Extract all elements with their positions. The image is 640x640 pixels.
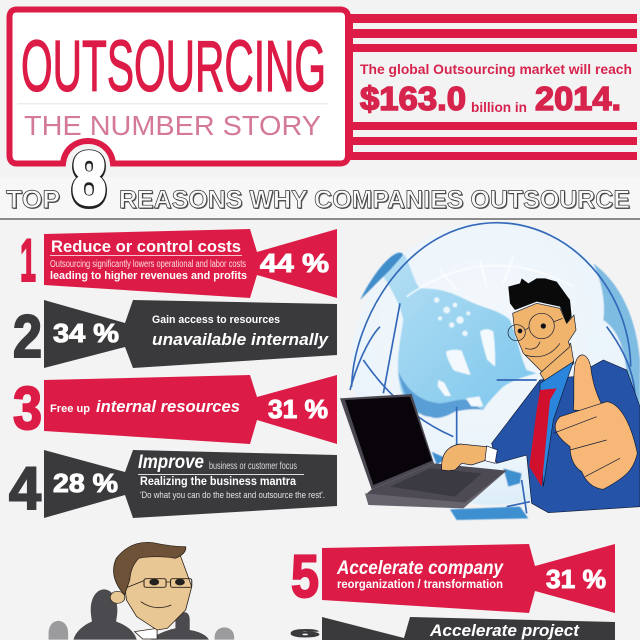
reason 2: 34 % [53,318,119,348]
number 5: 5 [291,543,319,610]
dark silhouettes [73,589,209,640]
globe rings [350,223,635,513]
reason 1: 1 [20,227,36,294]
number 6: 6 [291,628,319,640]
heading banner [0,137,640,221]
reason 4: business or customer focus [209,461,297,472]
reason 2 [13,300,337,370]
market stripes [350,14,637,160]
reason 6 [291,617,615,640]
businessman with silhouettes illustration [49,542,234,640]
heading banner: REASONS WHY COMPANIES OUTSOURCE [120,187,631,215]
reason 2: Gain access to resources [152,314,280,326]
reason 3: 31 % [268,394,328,424]
laptop [340,394,507,508]
reason 1: Outsourcing significantly lowers operational and labor costs [50,259,246,270]
title text: OUTSOURCING [21,27,326,107]
reason 4: Realizing the business mantra [140,476,297,488]
heading banner: REASONS WHY COMPANIES OUTSOURCE [119,186,630,214]
big number 8: 8 [72,138,106,221]
heading banner: TOP [7,187,61,215]
number 3: 3 [13,375,42,442]
globe illustration with man and laptop [340,222,640,520]
reason 5: reorganization / transformation [337,577,503,591]
man [442,278,640,513]
subtitle: THE NUMBER STORY [24,110,321,141]
market forecast text [360,62,632,117]
thumbs up fist [553,355,637,489]
reason 1 [20,227,337,298]
market forecast text: billion in [471,100,527,115]
reason 4 [9,450,337,522]
reason 3: internal resources [96,397,240,416]
reason 3: Free up [50,403,90,415]
market forecast text: The global Outsourcing market will reach [360,62,632,77]
hand on keyboard [442,444,487,471]
man head [110,542,192,639]
reason 5: Accelerate company [336,558,504,579]
reason 4: 28 % [53,468,118,498]
reason 6: Accelerate project [429,621,580,640]
reason 2: unavailable internally [152,330,330,349]
reason 1: 44 % [260,248,329,278]
market forecast text: 2014. [535,80,621,117]
globe [352,222,640,520]
reason 1: Reduce or control costs [51,237,241,256]
reason 5: 31 % [546,564,606,594]
big number 8: 8 [72,137,106,220]
title panel [10,10,348,164]
reason 5 [291,543,615,613]
number 4: 4 [9,455,42,522]
reason 3 [13,375,337,444]
reason 4: 'Do what you can do the best and outsource the rest'. [140,490,325,501]
reason 4: Improve [138,452,204,473]
number 2: 2 [13,303,42,370]
market forecast text: $163.0 [360,80,466,117]
reason 1: leading to higher revenues and profits [50,270,247,282]
heading banner: TOP [6,186,60,214]
light silhouettes [49,621,234,640]
